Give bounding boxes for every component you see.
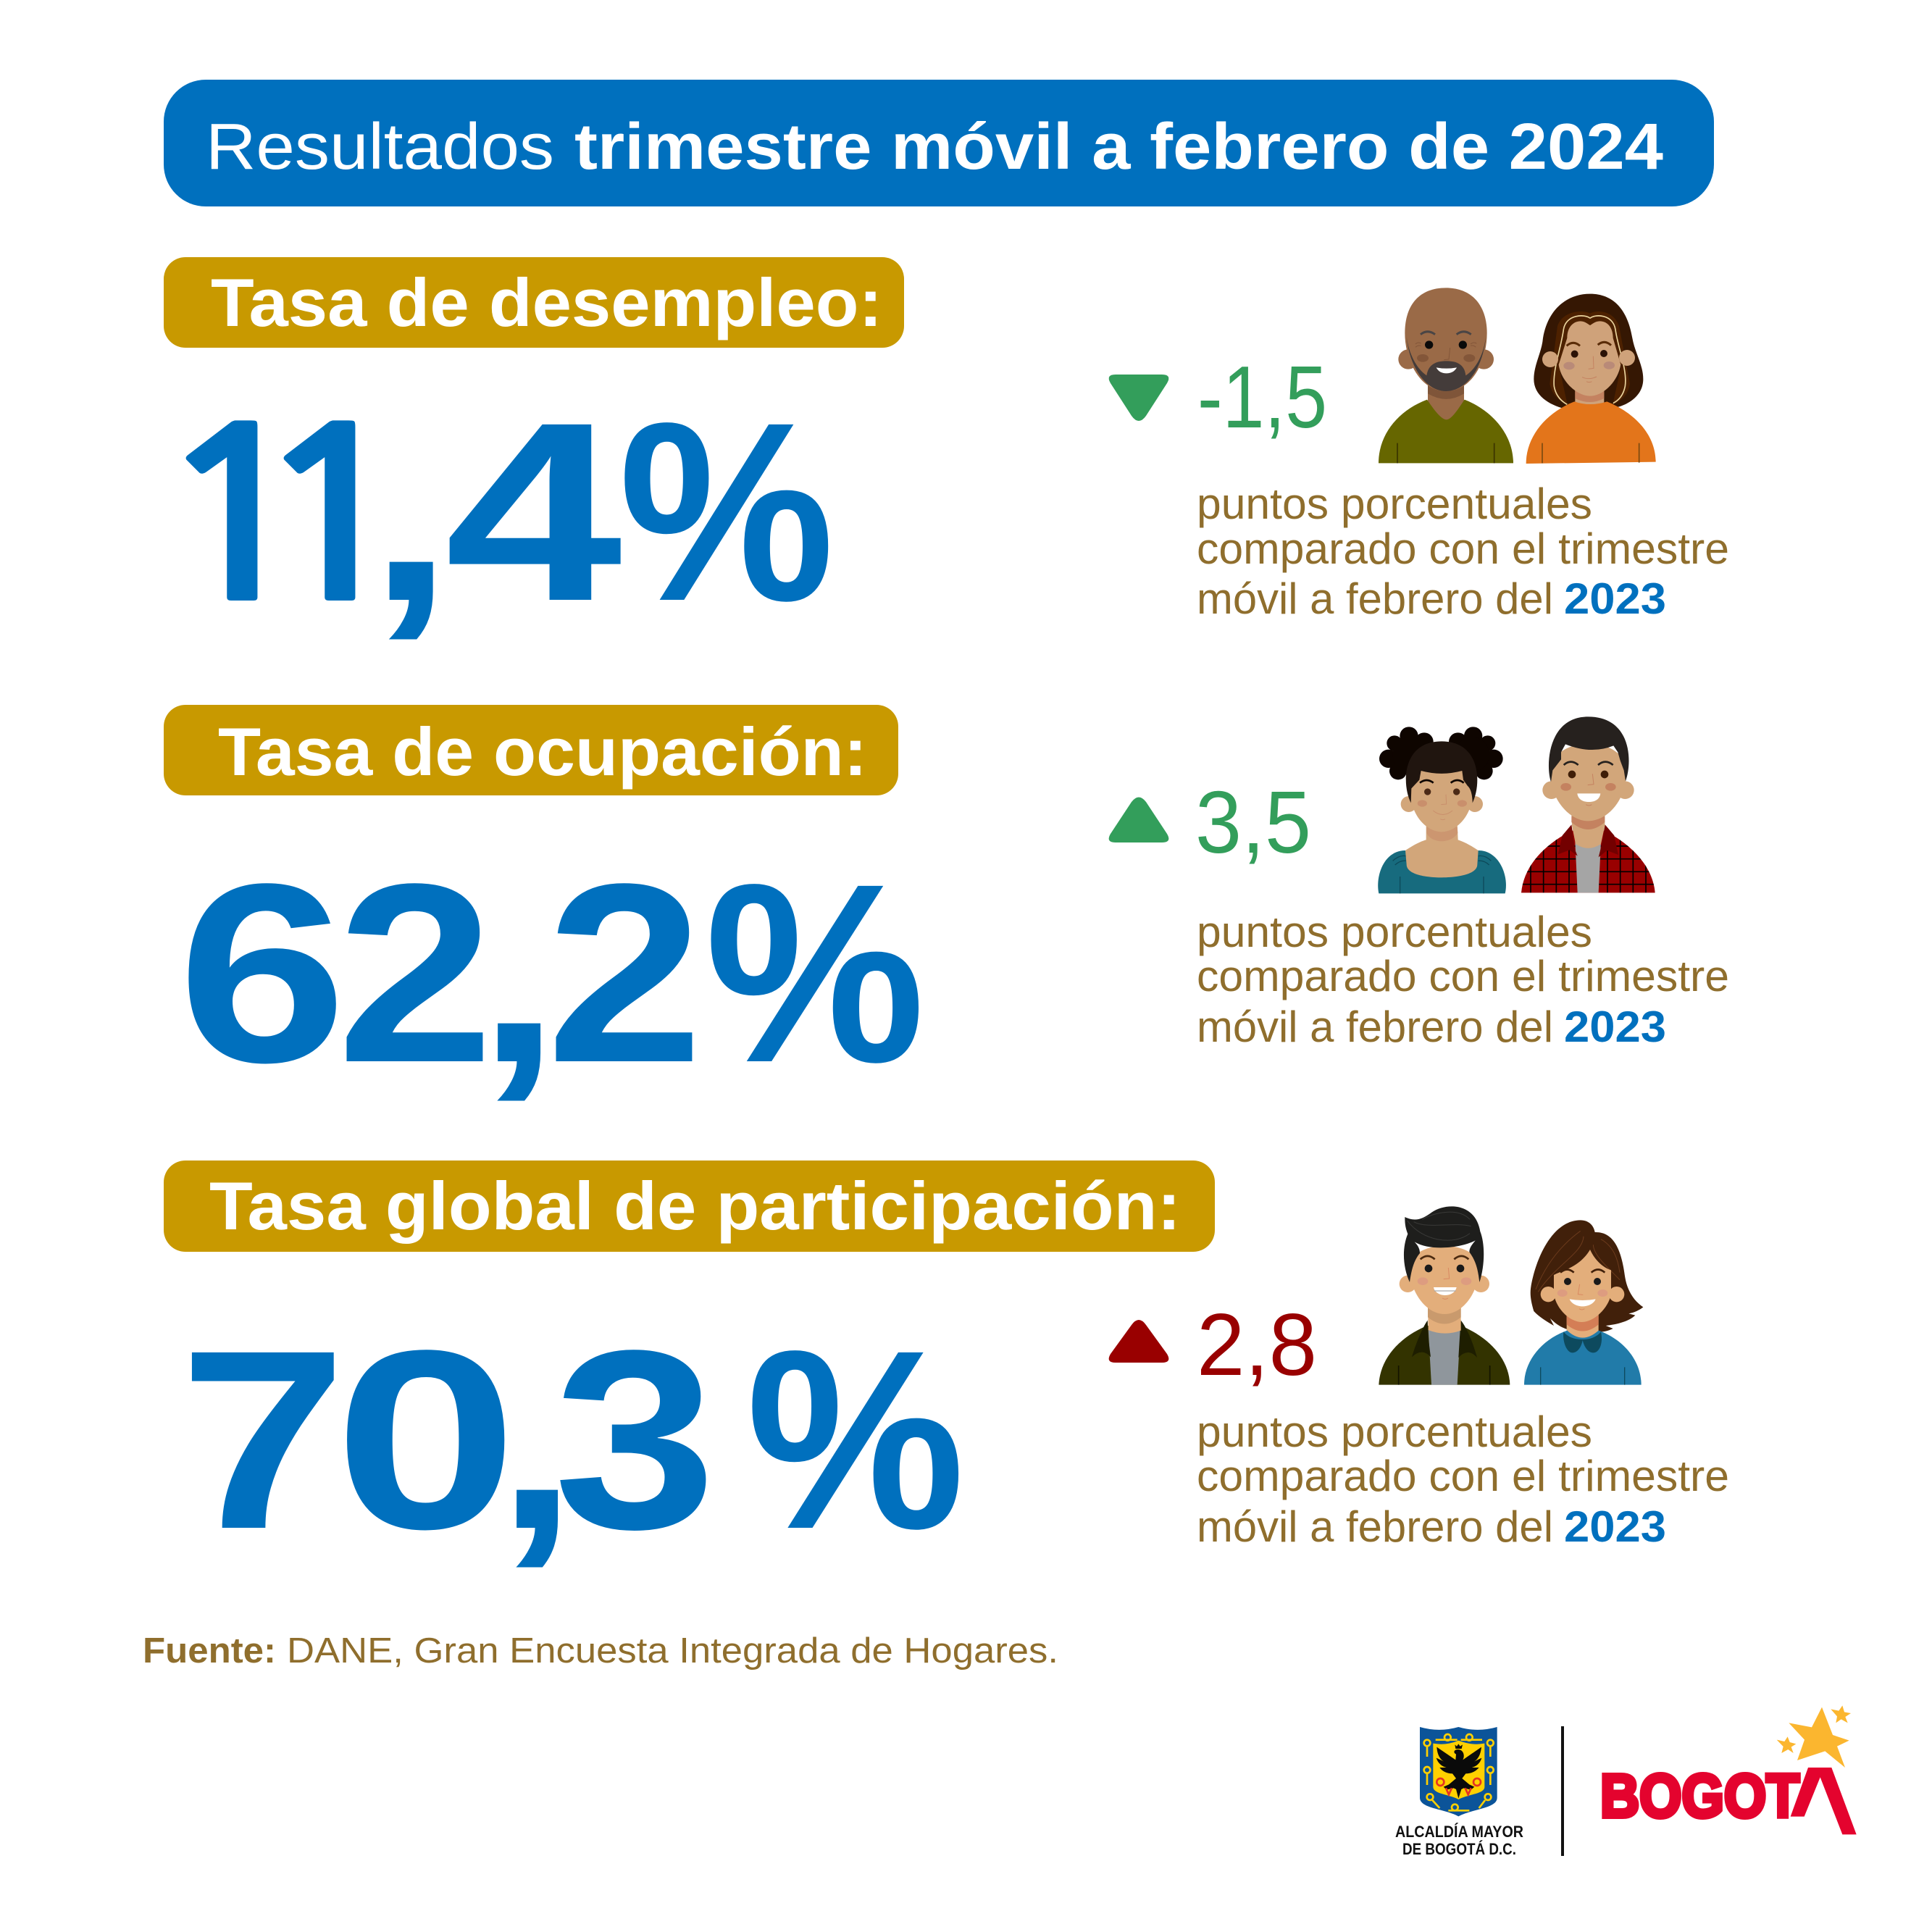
description text: 2023 <box>1564 1003 1666 1051</box>
heading: tasa global de participación: Tasa global de participación: <box>209 1168 1181 1244</box>
description text <box>1197 908 1729 1051</box>
panel: tasa global de participación <box>164 1161 1729 1582</box>
logo text: DE BOGOTÁ D.C. <box>1402 1840 1516 1858</box>
big number 70,3%: 3 <box>553 1297 716 1582</box>
icon: coat of arms <box>1420 1727 1497 1816</box>
description text: 2023 <box>1564 1502 1666 1551</box>
description text: móvil a febrero del <box>1197 1502 1553 1551</box>
wordmark: BOGOT <box>1600 1762 1799 1830</box>
description text: puntos porcentuales <box>1197 480 1592 528</box>
title bar: Resultados <box>206 111 554 183</box>
stylised A and stars <box>1777 1705 1857 1834</box>
heading: tasa de ocupación: Tasa de ocupación: <box>218 714 867 790</box>
man <box>1379 1326 1510 1385</box>
source note: DANE, Gran Encuesta Integrada de Hogares. <box>287 1631 1058 1670</box>
big number 11,4%: 1 <box>149 401 322 635</box>
big number 62,2%: 2 <box>546 830 703 1116</box>
icon: people pair, bald man and long-haired woman <box>1379 288 1656 464</box>
logo: Bogotá <box>1600 1705 1857 1834</box>
change value 3,5: 3,5 <box>1195 773 1311 871</box>
description text: comparado con el trimestre <box>1197 1452 1729 1500</box>
panel: tasa de ocupación <box>164 705 1729 1116</box>
logo: Alcaldía Mayor de Bogotá <box>1395 1727 1523 1858</box>
big number 11,4% <box>149 369 835 654</box>
logo text: ALCALDÍA MAYOR <box>1395 1823 1523 1841</box>
big number 11,4%: , <box>368 369 453 654</box>
big number 62,2% <box>177 830 925 1116</box>
girl <box>1379 727 1503 779</box>
logo text <box>1395 1823 1523 1858</box>
big number 11,4%: 4 <box>445 369 624 654</box>
panel: tasa de desempleo <box>149 257 1729 654</box>
description text <box>1197 480 1729 623</box>
change value -1,5: -1,5 <box>1197 348 1327 446</box>
man <box>1428 375 1464 422</box>
woman <box>1534 294 1643 409</box>
big number 62,2%: 6 <box>177 830 347 1116</box>
change value 2,8: 2,8 <box>1197 1295 1317 1394</box>
description text: puntos porcentuales <box>1197 908 1592 956</box>
big number 70,3%: % <box>746 1297 965 1582</box>
icon: people pair, girl with puffs and boy in plaid <box>1378 716 1657 893</box>
big number 70,3%: , <box>496 1297 577 1582</box>
description text: móvil a febrero del <box>1197 1003 1553 1051</box>
big number 62,2%: % <box>705 830 925 1116</box>
icon: red up arrow <box>1109 1320 1168 1363</box>
icon: green up arrow <box>1109 797 1168 842</box>
icon: green down arrow <box>1109 375 1168 421</box>
big number 11,4%: 1 <box>247 401 420 635</box>
icon: people pair, man with quiff and woman with bob <box>1379 1206 1643 1385</box>
big number 62,2%: , <box>477 830 561 1116</box>
description text <box>1197 1408 1729 1551</box>
source note: Fuente: <box>143 1631 276 1670</box>
big number 70,3% <box>179 1297 965 1582</box>
big number 70,3%: 7 <box>179 1297 347 1582</box>
description text: móvil a febrero del <box>1197 574 1553 623</box>
title bar <box>164 80 1714 206</box>
title bar: trimestre móvil a febrero de 2024 <box>574 111 1663 183</box>
description text: 2023 <box>1564 574 1666 623</box>
big number 62,2%: 2 <box>337 830 494 1116</box>
woman <box>1531 1220 1643 1331</box>
description text: puntos porcentuales <box>1197 1408 1592 1456</box>
heading: tasa de desempleo: Tasa de desempleo: <box>211 264 882 340</box>
description text: comparado con el trimestre <box>1197 524 1729 573</box>
big number 11,4%: % <box>619 369 835 654</box>
description text: comparado con el trimestre <box>1197 952 1729 1000</box>
logo divider <box>1561 1726 1564 1856</box>
big number 70,3%: 0 <box>334 1297 518 1582</box>
